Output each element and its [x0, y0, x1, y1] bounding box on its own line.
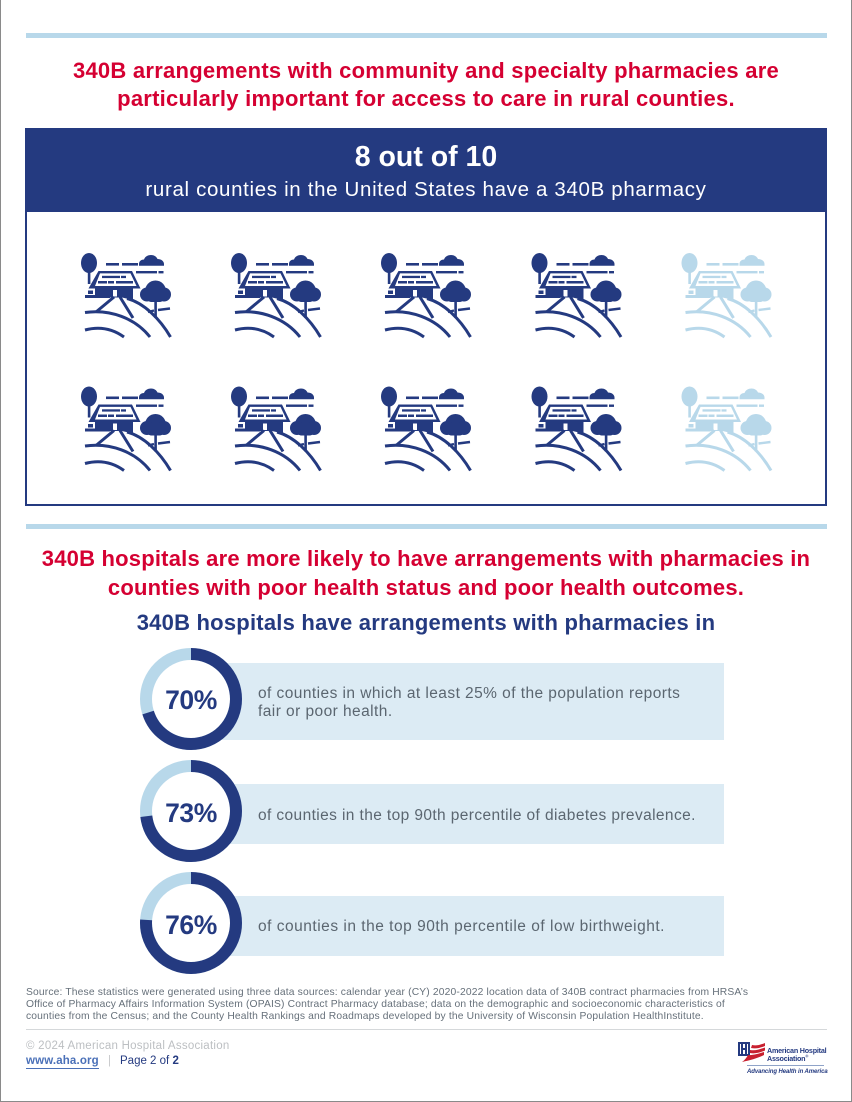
donut: 76%	[140, 872, 242, 974]
value: 73%	[165, 798, 217, 828]
panel frame	[25, 128, 827, 506]
description: fair or poor health.	[258, 702, 393, 720]
logo wordmark: Association®	[767, 1053, 808, 1062]
icon: farm 5 faded	[682, 253, 772, 337]
text band	[190, 896, 724, 956]
row: 70 percent	[140, 648, 724, 750]
value: 70%	[165, 685, 217, 715]
icon: farm 10 faded	[682, 386, 772, 470]
copyright: © 2024 American Hospital Association	[26, 1040, 230, 1052]
logo: American Hospital Association	[738, 1042, 828, 1075]
icon: farm 2	[231, 253, 321, 337]
banner	[25, 128, 827, 212]
logo tagline: Advancing Health in America	[747, 1069, 828, 1075]
icon: farm 4	[532, 253, 622, 337]
logo wordmark: American Hospital	[767, 1046, 826, 1055]
heading: poor health counties: 340B hospitals are more likely to have arrangements with pharmacies in	[42, 546, 810, 571]
text band	[190, 663, 724, 740]
heading: rural access	[73, 58, 779, 111]
source note: Office of Pharmacy Affairs Information System (OPAIS) Contract Pharmacy database; data on the demographic and socioeconomic characteristics of	[26, 999, 725, 1010]
logo mark	[738, 1042, 765, 1062]
row: 76 percent	[140, 872, 724, 974]
source note: counties from the Census; and the County Health Rankings and Roadmaps developed by the University of Wisconsin Population HealthInstitute.	[26, 1011, 704, 1022]
heading: rural access: 340B arrangements with community and specialty pharmacies are	[73, 58, 779, 83]
description: of counties in the top 90th percentile of low birthweight.	[258, 918, 665, 935]
website link: www.aha.org	[26, 1055, 99, 1067]
icon: farm 7	[231, 386, 321, 470]
banner subtitle: rural counties in the United States have a 340B pharmacy	[145, 178, 707, 201]
icon: farm 6	[81, 386, 171, 470]
description: of counties in which at least 25% of the population reports	[258, 685, 680, 702]
page number: | Page 2 of 2	[108, 1055, 179, 1067]
banner headline: 8 out of 10	[355, 141, 497, 173]
description: of counties in the top 90th percentile of diabetes prevalence.	[258, 807, 696, 824]
logo rule	[747, 1065, 824, 1066]
icon: farm 9	[532, 386, 622, 470]
footer divider	[26, 1029, 827, 1030]
icon: farm 8	[381, 386, 471, 470]
middle divider	[26, 524, 827, 529]
value: 76%	[165, 910, 217, 940]
donut: 70%	[140, 648, 242, 750]
heading: rural access: particularly important for access to care in rural counties.	[117, 86, 735, 111]
top divider	[26, 33, 827, 38]
row: 73 percent	[140, 760, 724, 862]
heading: poor health counties	[42, 546, 810, 600]
icon: farm 3	[381, 253, 471, 337]
text band	[190, 784, 724, 844]
source note	[26, 987, 748, 1022]
icon: farm 1	[81, 253, 171, 337]
donut: 73%	[140, 760, 242, 862]
logo wordmark	[767, 1046, 826, 1062]
panel: rural counties	[25, 128, 827, 506]
description	[258, 685, 680, 720]
icon grid: 8 of 10 rural counties	[81, 253, 772, 472]
source note: Source: These statistics were generated using three data sources: calendar year (CY) 2020-2022 location data of 340B contract pharmacies from HRSA’s	[26, 987, 748, 998]
heading: poor health counties: counties with poor health status and poor health outcomes.	[108, 574, 744, 600]
subheading: 340B hospitals have arrangements with pharmacies in	[137, 610, 715, 635]
